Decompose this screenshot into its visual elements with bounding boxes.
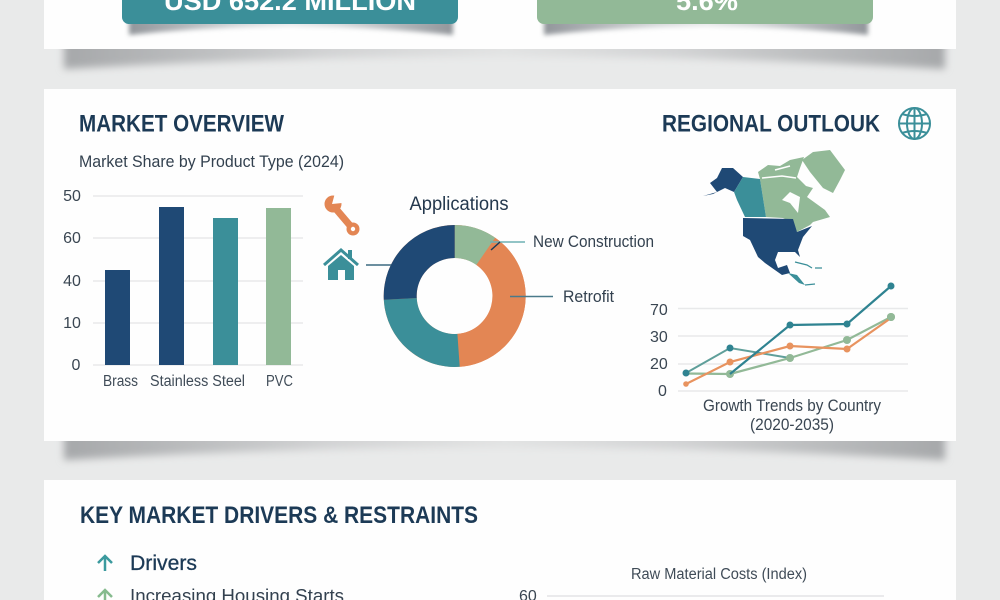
heading: drivers and restraints: KEY MARKET DRIVERS & RESTRAINTS (80, 502, 478, 529)
bar chart: market share by product type: 60 (63, 230, 81, 247)
greenland and canada (758, 150, 845, 232)
line chart: growth trends by country: 20 (650, 356, 668, 373)
heading: market overview: MARKET OVERVIEW (79, 110, 285, 138)
united states and mexico (743, 218, 812, 275)
line chart: growth trends by country: 30 (650, 329, 668, 346)
central america (788, 273, 805, 285)
panel: headline stats (44, 0, 956, 69)
western canada (734, 177, 766, 217)
panel: market overview and regional outlook (44, 89, 956, 460)
bar chart: market share by product type: Stainless Steel (150, 373, 245, 390)
bar chart: market share by product type: Market Share by Product Type (2024) (79, 152, 344, 171)
line chart: growth trends by country: 0 (658, 383, 667, 400)
caribbean (795, 262, 822, 285)
icon: wrench (324, 193, 360, 236)
arctic channels (762, 166, 796, 178)
series: teal upper (686, 348, 790, 373)
map: north america (703, 150, 845, 285)
bar chart: market share by product type (63, 152, 344, 390)
bar chart: market share by product type: 0 (72, 357, 81, 374)
line chart: growth trends by country (650, 282, 908, 434)
series: green (686, 313, 895, 378)
icon: globe (899, 108, 930, 139)
label: retrofit: Retrofit (563, 287, 614, 306)
bar chart: market share by product type: 50 (63, 188, 81, 205)
stat card: growth rate (537, 0, 873, 24)
alaska (703, 168, 743, 196)
icon: house (324, 250, 358, 280)
line chart: growth trends by country: (2020-2035) (750, 415, 834, 434)
bar chart: market share by product type: Brass (103, 373, 138, 390)
series: orange (683, 318, 891, 387)
heading: regional outlook: REGIONAL OUTLOUK (662, 110, 880, 138)
chart: raw material costs (519, 566, 884, 600)
chart: raw material costs: Raw Material Costs (Index) (631, 566, 807, 583)
bar chart: market share by product type: 40 (63, 273, 81, 290)
line chart: growth trends by country: 70 (650, 302, 668, 319)
bar chart: market share by product type: 10 (63, 315, 81, 332)
leader: new construction (490, 242, 525, 250)
leader: retrofit (510, 296, 553, 298)
icon: drivers arrow (98, 556, 112, 571)
hudson bay (782, 192, 800, 213)
line chart: growth trends by country: Growth Trends by Country (703, 396, 881, 415)
donut chart: applications (366, 194, 654, 367)
bar chart: market share by product type: PVC (266, 373, 293, 390)
subheading: drivers: Drivers (130, 552, 197, 575)
label: new construction: New Construction (533, 232, 654, 251)
icon: driver item arrow (98, 590, 112, 600)
leader: house (366, 264, 391, 266)
donut chart: applications: Applications (410, 194, 508, 215)
panel: key market drivers and restraints (44, 480, 956, 600)
series: teal lead (682, 282, 894, 376)
stat card: market size (122, 0, 458, 24)
